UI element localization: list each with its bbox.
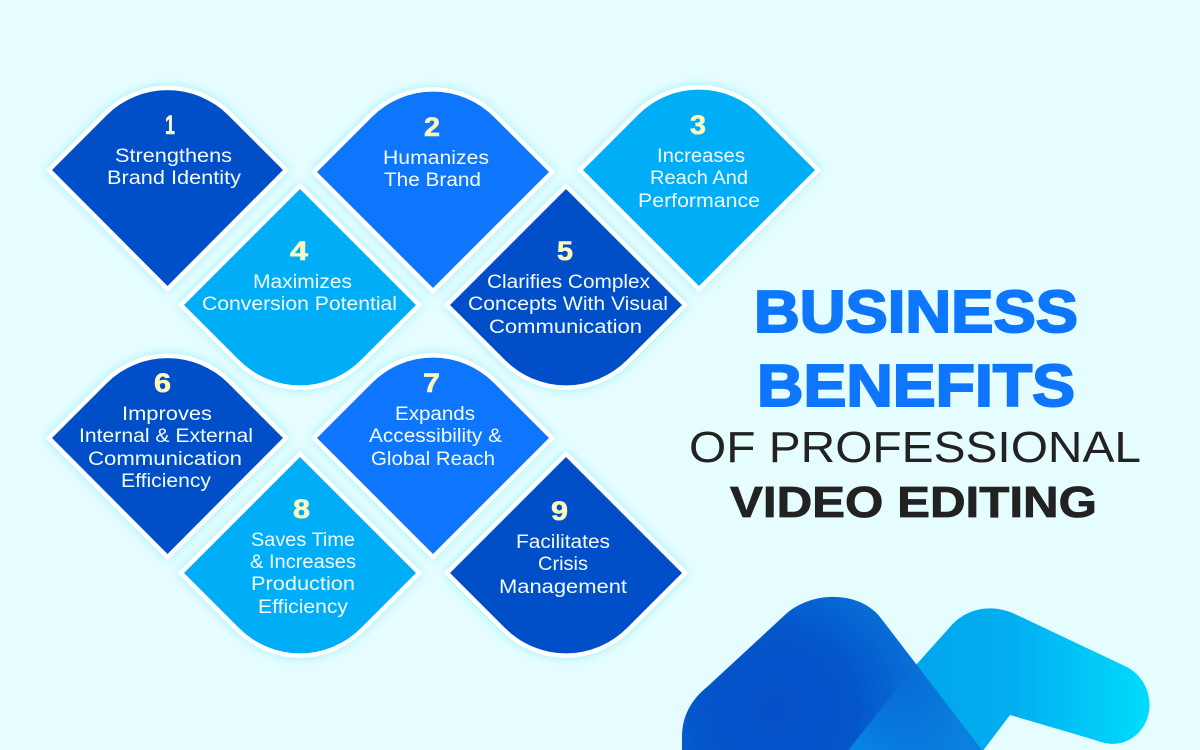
label 8: Efficiency <box>258 597 349 618</box>
number 3: 3 <box>690 110 706 140</box>
label 5: Communication <box>489 317 642 338</box>
label 8: & Increases <box>250 552 356 573</box>
label 2: Humanizes <box>383 148 489 169</box>
panel: benefit 6 <box>52 358 283 554</box>
number 8: 8 <box>293 494 310 524</box>
label 4: Maximizes <box>253 272 352 293</box>
decorative logo shapes <box>682 597 1149 750</box>
label 9 <box>499 532 628 598</box>
label 3: Reach And <box>650 168 748 189</box>
label 7 <box>369 404 502 470</box>
label 7: Global Reach <box>371 449 495 470</box>
label 8: Production <box>251 574 355 595</box>
label 9: Management <box>499 577 628 598</box>
label 3: Increases <box>657 146 745 167</box>
panel: benefit 4 <box>184 189 416 385</box>
label 9: Facilitates <box>516 532 610 553</box>
number 6: 6 <box>154 368 171 398</box>
label 8 <box>250 530 356 618</box>
number 9: 9 <box>551 496 568 526</box>
heading: business benefits: BUSINESS <box>754 279 1078 345</box>
label 7: Accessibility & <box>369 426 502 447</box>
label 4: Conversion Potential <box>202 294 397 315</box>
label 9: Crisis <box>538 554 588 575</box>
label 2: The Brand <box>384 170 481 191</box>
panel: benefit 8 <box>184 457 416 653</box>
heading: business benefits: BENEFITS <box>757 353 1075 419</box>
number 5: 5 <box>557 236 573 266</box>
number 7: 7 <box>423 368 440 398</box>
title <box>689 279 1141 527</box>
label 5: Concepts With Visual <box>468 294 668 315</box>
label 8: Saves Time <box>251 530 355 551</box>
subheading: of professional: OF PROFESSIONAL <box>689 423 1141 472</box>
label 2 <box>383 148 489 191</box>
label 1: Brand Identity <box>107 168 242 189</box>
subheading: video editing: VIDEO EDITING <box>730 478 1097 527</box>
label 3 <box>638 146 760 212</box>
heading: business benefits <box>754 279 1078 419</box>
panel: benefit 9 <box>450 457 682 653</box>
number 2: 2 <box>424 112 440 142</box>
label 1: Strengthens <box>115 146 232 167</box>
label 6: Efficiency <box>121 471 212 492</box>
label 1 <box>107 146 242 189</box>
label 5: Clarifies Complex <box>487 272 651 293</box>
panel: benefit 5 <box>450 189 682 385</box>
number 4: 4 <box>290 236 308 266</box>
label 6 <box>79 404 253 492</box>
panel: benefit 1 <box>52 90 283 286</box>
panel: benefit 3 <box>583 90 815 286</box>
label 6: Internal & External <box>79 426 253 447</box>
label 3: Performance <box>638 191 760 212</box>
label 4 <box>202 272 397 315</box>
label 6: Communication <box>88 449 242 470</box>
panel: benefit 2 <box>317 92 549 288</box>
label 5 <box>468 272 668 338</box>
label 7: Expands <box>395 404 475 425</box>
number 1: 1 <box>165 110 175 140</box>
panel: benefit 7 <box>317 358 549 554</box>
label 6: Improves <box>122 404 212 425</box>
